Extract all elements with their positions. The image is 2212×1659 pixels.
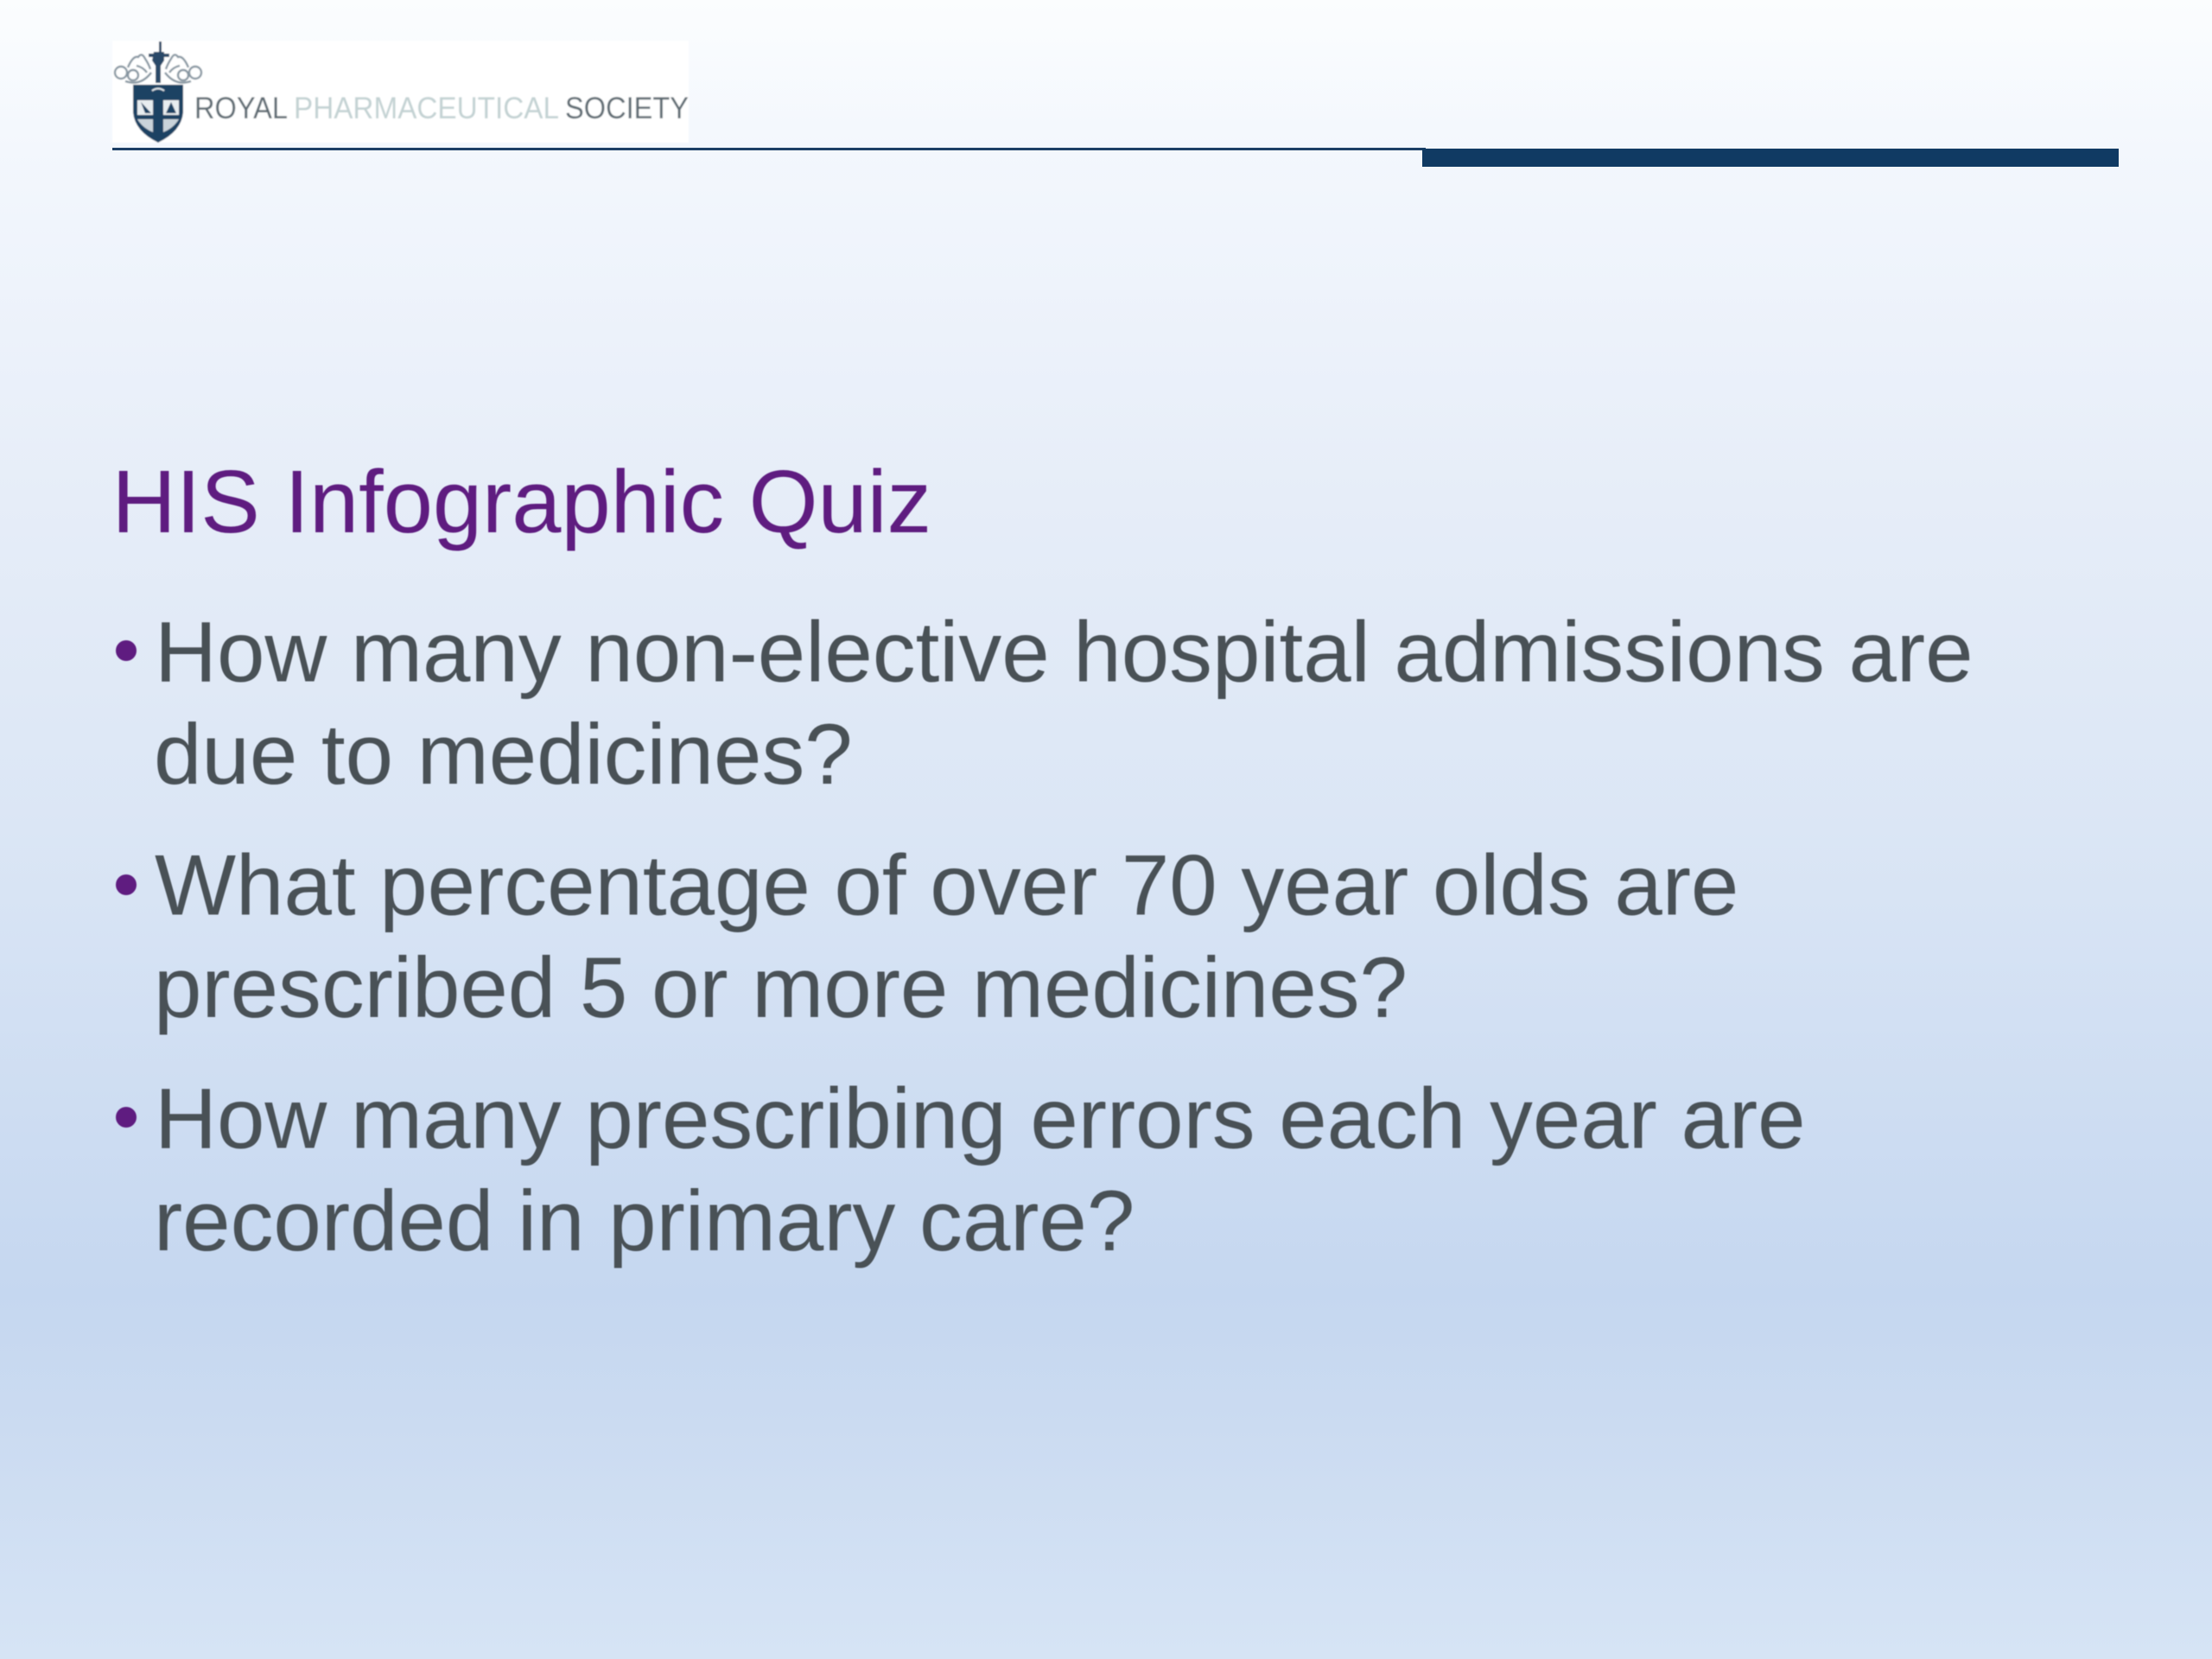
logo wordmark: PHARMACEUTICAL <box>294 92 559 125</box>
bullet 3: How many prescribing errors each year are <box>155 1071 1806 1166</box>
logo wordmark <box>194 92 689 125</box>
icon: shield <box>133 85 183 143</box>
bullet 2: What percentage of over 70 year olds are <box>155 838 1738 933</box>
header rule <box>112 148 1426 150</box>
bullet 1: due to medicines? <box>154 707 853 803</box>
logo: Royal Pharmaceutical Society <box>112 41 689 143</box>
logo wordmark: SOCIETY <box>565 92 689 125</box>
bullet 3: recorded in primary care? <box>154 1173 1135 1269</box>
bullet 2 <box>116 838 1738 1036</box>
bullet 2: prescribed 5 or more medicines? <box>154 940 1408 1036</box>
bullet 3 <box>116 1071 1806 1269</box>
header bar <box>1422 149 2119 167</box>
title: HIS Infographic Quiz <box>112 452 931 551</box>
bullet 1: How many non-elective hospital admissions are <box>155 605 1974 700</box>
icon: crest <box>115 41 201 83</box>
bullet 1 <box>116 605 1974 803</box>
logo wordmark: ROYAL <box>194 92 288 125</box>
